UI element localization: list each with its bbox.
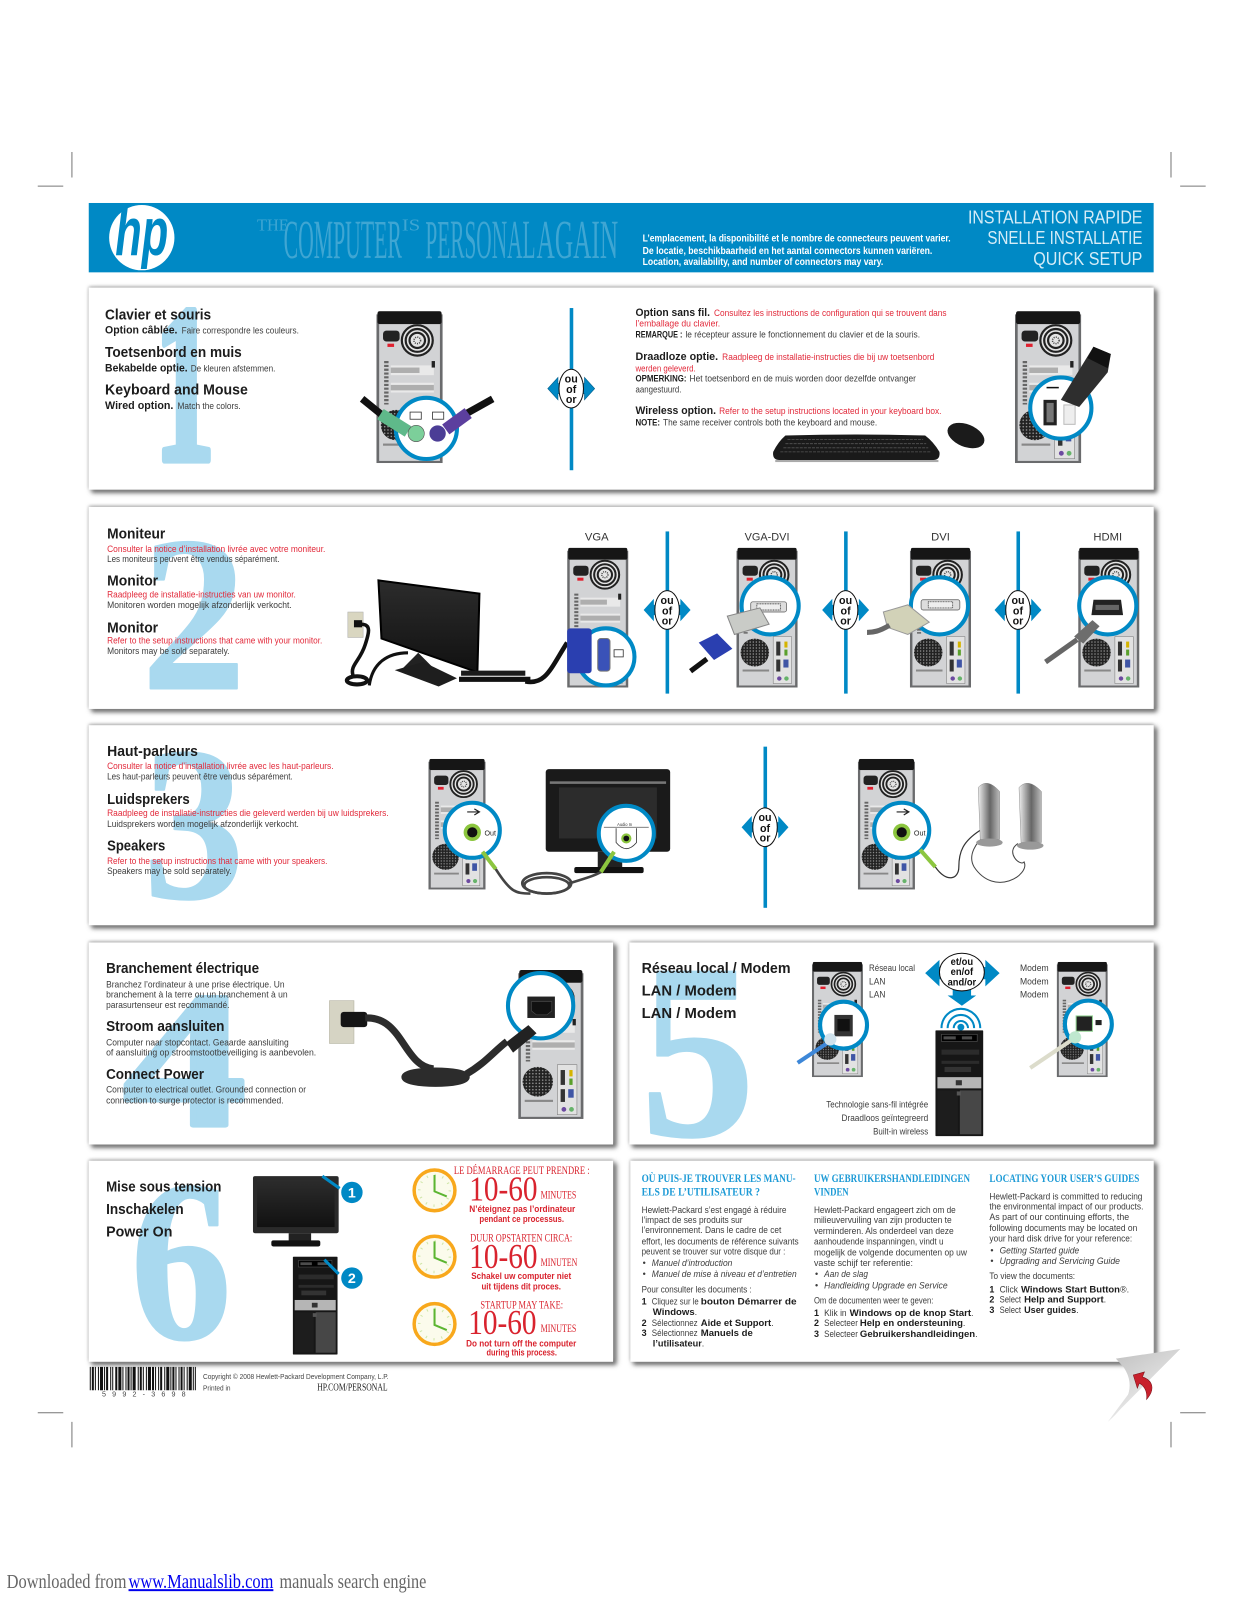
- speakers text: Les haut-parleurs peuvent être vendus séparément.: [107, 771, 293, 781]
- column: Dutch: 1: [814, 1308, 819, 1318]
- connector availability note: Location, availability, and number of connectors may vary.: [643, 257, 884, 268]
- column: French: l’impact de ses produits sur: [642, 1215, 743, 1225]
- startup time: French: pendant ce processus.: [479, 1214, 564, 1224]
- column: Dutch: Hewlett-Packard engageert zich om de: [814, 1205, 956, 1215]
- wireless option text: NOTE:: [635, 417, 660, 427]
- column: Dutch: 2: [814, 1318, 819, 1328]
- built-in wireless labels: Built-in wireless: [873, 1126, 929, 1136]
- column: English: •: [990, 1256, 994, 1266]
- panel 4: connect power: [89, 942, 613, 1167]
- speakers text: Raadpleeg de installatie-instructies die geleverd werden bij uw luidsprekers.: [107, 808, 389, 818]
- numeral 3: 3: [144, 704, 244, 946]
- startup time: French: N’éteignez pas l’ordinateur: [469, 1204, 576, 1214]
- logo: hp: [109, 195, 174, 270]
- slogan: PERSONAL: [425, 209, 536, 270]
- column: English: Click: [1000, 1284, 1018, 1294]
- column: Dutch: 3: [814, 1329, 819, 1339]
- or divider: ou: [758, 812, 772, 824]
- wireless keyboard: [773, 435, 940, 462]
- column: English: Select: [1000, 1305, 1021, 1315]
- wired option text: Option câblée.: [105, 325, 177, 337]
- wired option text: Faire correspondre les couleurs.: [182, 326, 299, 336]
- column: English: Upgrading and Servicing Guide: [1000, 1256, 1120, 1266]
- startup time: English: MINUTES: [541, 1323, 576, 1335]
- monitor text: Monitor: [107, 620, 158, 636]
- power text: [106, 961, 316, 1106]
- modem labels: [1020, 963, 1049, 1000]
- banner titles: QUICK SETUP: [1033, 248, 1142, 269]
- VGA-DVI connection: VGA-DVI: [745, 532, 790, 544]
- banner titles: [968, 206, 1142, 269]
- monitor rear three-quarter view: [369, 580, 567, 686]
- wireless option text: Het toetsenbord en de muis worden door dezelfde ontvanger: [690, 373, 916, 383]
- VGA-DVI connection: [691, 532, 799, 687]
- column: Dutch: aanhoudende inspanningen, vindt u: [814, 1236, 944, 1246]
- startup time: Dutch: DUUR OPSTARTEN CIRCA:: [470, 1232, 572, 1244]
- column: English: Select: [1000, 1295, 1021, 1305]
- monitor text: Consulter la notice d’installation livrée avec votre moniteur.: [107, 544, 325, 554]
- LAN labels: Réseau local: [869, 963, 915, 973]
- monitor text: Monitor: [107, 573, 158, 589]
- panel 7: user guides: [630, 1161, 1154, 1362]
- column: Dutch: mogelijk de volgende documenten op uw: [814, 1248, 967, 1258]
- or divider: ou: [839, 595, 852, 607]
- monitor text: Raadpleeg de installatie-instructies van uw monitor.: [107, 590, 296, 600]
- column: French: Hewlett-Packard s’est engagé à réduire: [642, 1205, 786, 1215]
- column: French: Sélectionnez: [652, 1328, 698, 1338]
- column: English: To view the documents:: [989, 1271, 1075, 1281]
- power on headings: Mise sous tension: [106, 1179, 221, 1195]
- speakers text: Luidsprekers worden mogelijk afzonderlijk verkocht.: [107, 819, 299, 829]
- step 1 badge: 1: [348, 1186, 356, 1202]
- power on headings: Power On: [106, 1224, 172, 1240]
- banner titles: SNELLE INSTALLATIE: [987, 227, 1142, 248]
- audio cable: [496, 869, 601, 894]
- column: French: .: [695, 1307, 697, 1317]
- or divider: [548, 308, 595, 470]
- connector availability note: L’emplacement, la disponibilité et le nombre de connecteurs peuvent varier.: [643, 234, 951, 245]
- wireless option text: Refer to the setup instructions located in your keyboard box.: [719, 406, 941, 416]
- monitor rear with audio in callout: [546, 769, 670, 873]
- column: English: .: [1104, 1295, 1106, 1305]
- or divider: [995, 531, 1041, 694]
- column: Dutch: verminderen. Als onderdeel van deze: [814, 1226, 954, 1236]
- wall outlet and power cable: [329, 1001, 507, 1083]
- modem labels: Modem: [1020, 963, 1049, 973]
- startup time: Dutch: 10-60: [469, 1237, 538, 1276]
- wireless option text: Draadloze optie.: [635, 351, 718, 363]
- connector availability note: De locatie, beschikbaarheid en het aantal connectors kunnen variëren.: [643, 246, 933, 257]
- panel 6: power on: [89, 1133, 613, 1388]
- power text: branchement à la terre ou un branchement à un: [106, 990, 288, 1000]
- power text: Connect Power: [106, 1067, 204, 1083]
- column: French: 3: [642, 1328, 647, 1338]
- wireless option text: Option sans fil.: [635, 307, 710, 319]
- column: Dutch: .: [971, 1308, 974, 1318]
- column: English: User guides: [1024, 1305, 1076, 1315]
- download footer: Downloaded from: [7, 1571, 127, 1593]
- tower with power socket callout: [506, 970, 583, 1119]
- power text: Branchement électrique: [106, 961, 259, 977]
- and/or selector: [925, 953, 1000, 1006]
- tower with audio out callout: [858, 759, 935, 889]
- copyright: HP.COM/PERSONAL: [317, 1382, 388, 1393]
- column: French: Manuels de: [701, 1328, 753, 1338]
- column: English: Getting Started guide: [1000, 1246, 1079, 1256]
- download footer: manuals search engine: [279, 1571, 427, 1593]
- startup time: Dutch: uit tijdens dit proces.: [481, 1281, 561, 1291]
- wired option text: Keyboard and Mouse: [105, 383, 248, 399]
- startup time: French: 10-60: [469, 1170, 538, 1209]
- numeral 6: 6: [131, 1133, 232, 1388]
- column: French: Cliquez sur le: [652, 1297, 699, 1307]
- wireless option text: REMARQUE :: [635, 330, 682, 340]
- speakers: [935, 783, 1043, 882]
- crop marks: [38, 152, 1206, 1447]
- column: English: LOCATING YOUR USER’S GUIDES: [989, 1173, 1139, 1185]
- DVI connection: [867, 532, 971, 687]
- LAN labels: LAN: [869, 976, 885, 986]
- wireless option text: Wireless option.: [635, 405, 716, 417]
- speakers text: Refer to the setup instructions that came with your speakers.: [107, 856, 327, 866]
- or divider: ou: [1011, 595, 1025, 607]
- LAN modem headings: Réseau local / Modem: [642, 961, 791, 977]
- VGA connection: VGA: [585, 532, 609, 544]
- column: English: .: [1076, 1305, 1079, 1315]
- startup time: Dutch: MINUTEN: [541, 1257, 577, 1269]
- column: English: ®.: [1120, 1284, 1129, 1294]
- tower with audio out callout: Out: [914, 829, 925, 837]
- built-in wireless labels: Draadloos geïntegreerd: [842, 1113, 928, 1123]
- startup time: English: STARTUP MAY TAKE:: [480, 1300, 563, 1312]
- numeral 2: 2: [142, 492, 246, 737]
- panel 3: speakers: [89, 704, 1154, 946]
- column: English: [989, 1173, 1143, 1315]
- column: English: the environmental impact of our products.: [989, 1202, 1143, 1212]
- monitor text: [107, 527, 325, 656]
- power text: connection to surge protector is recommended.: [106, 1096, 284, 1106]
- column: English: your hard disk drive for your reference:: [989, 1233, 1132, 1243]
- step 2 badge: 2: [348, 1271, 356, 1287]
- LAN modem headings: [642, 961, 791, 1022]
- speakers text: Speakers may be sold separately.: [107, 866, 232, 876]
- or divider: of: [566, 384, 577, 396]
- column: French: [642, 1173, 799, 1348]
- or divider: of: [1013, 606, 1023, 618]
- column: Dutch: •: [815, 1280, 818, 1290]
- wired option text: Match the colors.: [177, 401, 241, 411]
- panel 2: monitor: [89, 492, 1154, 737]
- modem labels: Modem: [1020, 976, 1049, 986]
- speakers text: Luidsprekers: [107, 792, 190, 808]
- column: French: Aide et Support: [701, 1318, 771, 1328]
- startup time: Dutch: [414, 1232, 577, 1291]
- startup time: English: 10-60: [468, 1303, 537, 1342]
- column: English: 2: [989, 1295, 994, 1305]
- startup time: French: [414, 1165, 590, 1224]
- column: English: Help and Support: [1024, 1295, 1104, 1305]
- column: Dutch: Gebruikershandleidingen: [860, 1329, 975, 1339]
- column: French: OÙ PUIS-JE TROUVER LES MANU-: [642, 1173, 796, 1185]
- HDMI connection: HDMI: [1093, 532, 1122, 544]
- modem labels: Modem: [1020, 990, 1049, 1000]
- column: Dutch: •: [815, 1269, 818, 1279]
- panel 5: LAN and modem: [629, 913, 1154, 1190]
- startup time: French: LE DÉMARRAGE PEUT PRENDRE :: [454, 1165, 590, 1177]
- download footer: [7, 1571, 427, 1593]
- monitor text: Monitors may be sold separately.: [107, 646, 230, 656]
- startup time: Dutch: Schakel uw computer niet: [471, 1271, 571, 1281]
- column: Dutch: UW GEBRUIKERSHANDLEIDINGEN: [814, 1173, 970, 1185]
- wired option text: Toetsenbord en muis: [105, 345, 242, 361]
- wireless option text: The same receiver controls both the keyboard and mouse.: [663, 417, 877, 427]
- slogan: THE: [257, 216, 289, 235]
- column: French: peuvent se trouver sur votre disque dur :: [642, 1247, 785, 1257]
- and/or selector: en/of: [951, 967, 974, 978]
- column: French: l’environnement. Dans le cadre de cet: [642, 1225, 782, 1235]
- front tower with power button: [293, 1257, 339, 1355]
- step 2 badge: [341, 1267, 363, 1289]
- power text: Computer naar stopcontact. Geaarde aansluiting: [106, 1038, 289, 1048]
- startup time: English: [414, 1300, 577, 1358]
- copyright: Printed in: [203, 1384, 231, 1392]
- startup time: English: Do not turn off the computer: [466, 1338, 577, 1348]
- wireless option text: l’emballage du clavier.: [635, 318, 720, 328]
- or divider: of: [662, 606, 673, 618]
- column: English: Windows Start Button: [1021, 1284, 1120, 1294]
- column: French: Windows: [653, 1307, 695, 1317]
- column: Dutch: Om de documenten weer te geven:: [814, 1296, 933, 1306]
- power text: Stroom aansluiten: [106, 1019, 224, 1035]
- page curl with turn arrow: [1108, 1349, 1180, 1422]
- column: Dutch: Selecteer: [824, 1318, 858, 1328]
- column: French: effort, les documents de référence suivants: [642, 1236, 799, 1246]
- or divider: or: [566, 394, 577, 406]
- column: Dutch: milieuvervuiling van zijn producten te: [814, 1215, 952, 1225]
- column: French: bouton Démarrer de: [701, 1297, 797, 1307]
- column: Dutch: VINDEN: [814, 1186, 849, 1198]
- copyright: [203, 1373, 389, 1393]
- LAN modem headings: LAN / Modem: [642, 984, 736, 1000]
- power text: Computer to electrical outlet. Grounded connection or: [106, 1084, 306, 1094]
- DVI connection: DVI: [931, 532, 950, 544]
- wired option text: De kleuren afstemmen.: [191, 363, 275, 373]
- panel 1: keyboard and mouse: [89, 258, 1154, 509]
- wireless option text: OPMERKING:: [635, 373, 686, 383]
- column: French: Sélectionnez: [652, 1318, 698, 1328]
- wireless option text: Consultez les instructions de configuration qui se trouvent dans: [714, 308, 947, 318]
- or divider: [742, 747, 788, 908]
- startup time: English: during this process.: [487, 1348, 557, 1358]
- VGA connection: [567, 532, 634, 687]
- or divider: ou: [565, 374, 578, 386]
- download footer: www.Manualslib.com: [129, 1571, 274, 1593]
- column: English: As part of our continuing efforts, the: [989, 1212, 1129, 1222]
- column: French: l’utilisateur: [653, 1338, 702, 1348]
- LAN labels: [869, 963, 915, 1000]
- column: French: Pour consulter les documents :: [642, 1284, 752, 1294]
- wireless option text: aangestuurd.: [635, 385, 681, 395]
- monitor rear with audio in callout: Audio In: [617, 822, 632, 827]
- HDMI connection: [1046, 532, 1139, 687]
- column: Dutch: Windows op de knop Start: [850, 1308, 971, 1318]
- column: French: ELS DE L’UTILISATEUR ?: [642, 1186, 760, 1198]
- column: English: 3: [989, 1305, 994, 1315]
- tower with PS/2 callout: [362, 311, 493, 463]
- wireless mouse: [944, 418, 988, 453]
- speakers text: Consulter la notice d’installation livrée avec les haut-parleurs.: [107, 761, 334, 771]
- barcode: 5 9 9 2 - 3 6 9 8: [102, 1390, 186, 1398]
- startup time: French: MINUTES: [541, 1190, 576, 1202]
- column: Dutch: Klik in: [824, 1308, 847, 1318]
- wireless icon: [941, 1009, 980, 1030]
- column: Dutch: Selecteer: [824, 1329, 858, 1339]
- or divider: of: [841, 606, 851, 618]
- column: French: 2: [642, 1318, 647, 1328]
- column: English: following documents may be located on: [989, 1223, 1137, 1233]
- numeral 5: 5: [641, 913, 755, 1190]
- column: English: Hewlett-Packard is committed to reducing: [989, 1192, 1142, 1202]
- column: Dutch: Handleiding Upgrade en Service: [824, 1280, 948, 1290]
- LAN modem headings: LAN / Modem: [642, 1006, 736, 1022]
- slogan: IS: [402, 216, 420, 235]
- tower with modem callout: [1030, 962, 1112, 1077]
- and/or selector: and/or: [948, 977, 976, 988]
- built-in wireless labels: Technologie sans-fil intégrée: [826, 1100, 928, 1110]
- banner titles: INSTALLATION RAPIDE: [968, 206, 1142, 227]
- wired option text: Wired option.: [105, 400, 173, 412]
- slogan: COMPUTER: [284, 209, 402, 270]
- tower with USB callout: [1015, 311, 1111, 463]
- column: Dutch: Aan de slag: [823, 1269, 868, 1279]
- column: Dutch: Help en ondersteuning: [860, 1318, 963, 1328]
- wired option text: Bekabelde optie.: [105, 362, 188, 374]
- monitor text: Monitoren worden mogelijk afzonderlijk verkocht.: [107, 600, 292, 610]
- wireless option text: le récepteur assure le fonctionnement du clavier et de la souris.: [685, 330, 920, 340]
- column: French: 1: [642, 1297, 647, 1307]
- wireless option text: werden geleverd.: [635, 363, 696, 373]
- speakers text: [107, 744, 389, 876]
- or divider: [822, 531, 869, 694]
- wall outlet and power cable: [347, 612, 369, 684]
- copyright: Copyright © 2008 Hewlett-Packard Development Company, L.P.: [203, 1373, 389, 1381]
- wireless option text: [635, 307, 947, 427]
- column: French: .: [771, 1318, 774, 1328]
- step 1 badge: [341, 1182, 363, 1203]
- column: Dutch: .: [963, 1318, 965, 1328]
- column: French: Manuel d’introduction: [652, 1258, 732, 1268]
- or divider: of: [760, 823, 771, 835]
- logo: hp: hp: [115, 195, 168, 270]
- connector availability note: [643, 234, 951, 268]
- or divider: or: [840, 615, 851, 627]
- tower with audio out callout: [428, 759, 500, 889]
- or divider: or: [662, 615, 672, 627]
- monitor text: Les moniteurs peuvent être vendus séparément.: [107, 554, 279, 564]
- numeral 1: 1: [154, 258, 215, 509]
- banner: [89, 195, 1154, 272]
- numeral 4: 4: [123, 952, 246, 1167]
- column: French: •: [643, 1258, 646, 1268]
- or divider: or: [760, 833, 770, 845]
- column: French: .: [702, 1338, 704, 1348]
- or divider: [644, 531, 691, 694]
- tower with LAN callout: [798, 962, 867, 1077]
- speakers text: Speakers: [107, 839, 165, 855]
- monitor text: Refer to the setup instructions that came with your monitor.: [107, 636, 322, 646]
- column: English: •: [990, 1246, 994, 1256]
- power on headings: Inschakelen: [106, 1202, 184, 1218]
- front monitor with power button: [253, 1176, 340, 1246]
- barcode: [90, 1379, 196, 1398]
- column: French: •: [643, 1269, 646, 1279]
- banner: AGAIN: [537, 209, 618, 270]
- LAN labels: LAN: [869, 990, 885, 1000]
- tower with audio out callout: Out: [485, 829, 496, 837]
- or divider: or: [1013, 615, 1023, 627]
- wireless option text: Raadpleeg de installatie-instructies die bij uw toetsenbord: [722, 352, 934, 362]
- wired option text: [105, 307, 299, 412]
- column: Dutch: [814, 1173, 978, 1339]
- power text: of aansluiting op stroomstootbeveiliging is aanbevolen.: [106, 1048, 316, 1058]
- or divider: ou: [661, 595, 674, 607]
- built-in wireless labels: [826, 1100, 929, 1136]
- speakers text: Haut-parleurs: [107, 744, 198, 760]
- column: Dutch: .: [975, 1329, 978, 1339]
- column: French: Manuel de mise à niveau et d’entretien: [652, 1269, 797, 1279]
- wired option text: Clavier et souris: [105, 307, 211, 323]
- column: English: 1: [989, 1284, 994, 1294]
- front tower: [935, 1030, 983, 1136]
- power text: Branchez l’ordinateur à une prise électrique. Un: [106, 979, 285, 989]
- power on headings: [106, 1179, 221, 1240]
- and/or selector: et/ou: [951, 957, 973, 968]
- power text: parasurtenseur est recommandé.: [106, 1000, 230, 1010]
- column: Dutch: vaste schijf ter referentie:: [814, 1258, 913, 1268]
- monitor text: Moniteur: [107, 527, 165, 543]
